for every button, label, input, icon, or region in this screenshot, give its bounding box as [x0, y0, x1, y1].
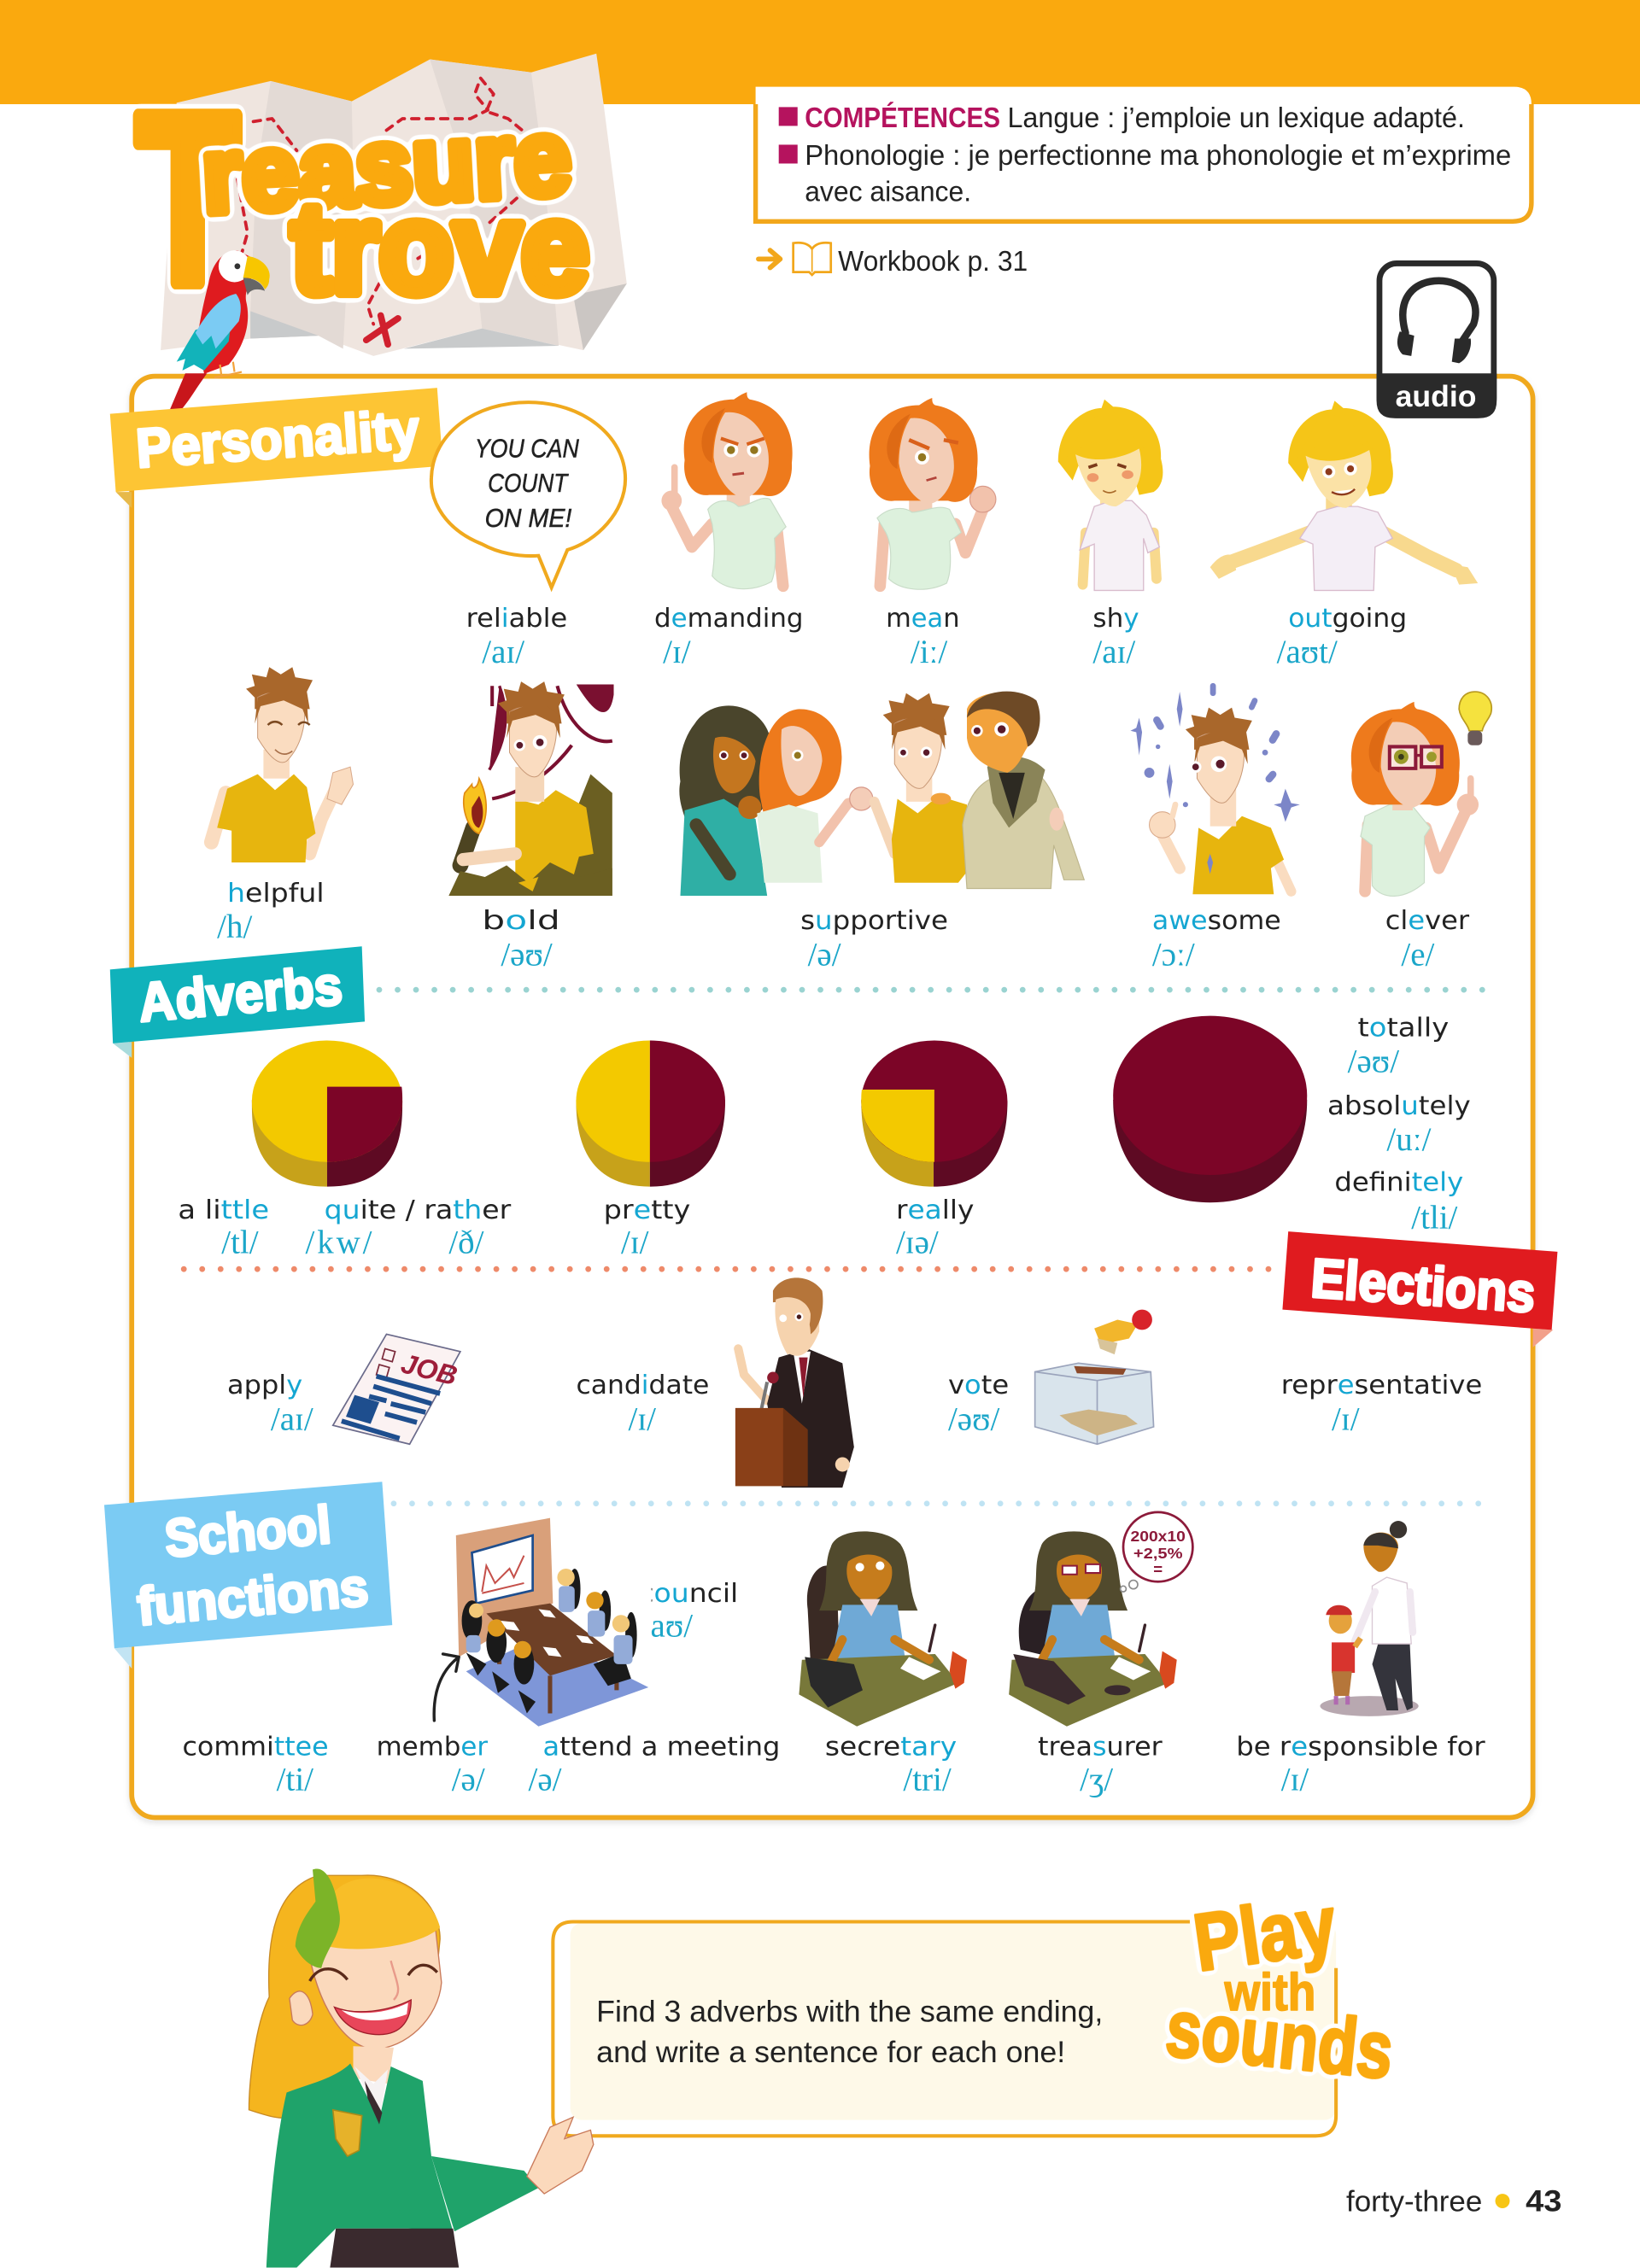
word: outgoing: [1277, 604, 1407, 670]
heading: Play with sounds: [1162, 1879, 1397, 2096]
word: supportive: /ə/: [808, 936, 841, 973]
illustration: helpful boy: [211, 667, 353, 862]
word: awesome: [1152, 906, 1281, 973]
illustration: treasurer: [1009, 1512, 1192, 1727]
heading: Personality: Personality: [134, 398, 421, 479]
word: pretty: [604, 1195, 690, 1261]
word: apply: /aɪ/: [271, 1400, 313, 1437]
heading: Adverbs: Adverbs: [136, 955, 345, 1033]
treasure cross: [366, 315, 398, 344]
panel: play with sounds activity: [553, 1921, 1336, 2136]
speech bubble: you can count on me: COUNT: [488, 469, 569, 498]
page number footer: forty-three: [1346, 2185, 1482, 2218]
word: absolutely: /uː/: [1386, 1121, 1432, 1158]
illustration: clever girl with light bulb: [1351, 692, 1491, 896]
word: apply: [227, 1371, 313, 1437]
word: be responsible for: [1236, 1733, 1485, 1797]
title: Treasure trove: [136, 63, 589, 334]
word: council: council: [638, 1579, 738, 1609]
word: representative: /ɪ/: [1332, 1400, 1360, 1437]
word: member: /ə/: [452, 1761, 485, 1797]
word: treasurer: /ʒ/: [1080, 1761, 1113, 1797]
heading: Elections: [1282, 1231, 1557, 1347]
icon: parrot: [165, 250, 270, 424]
illustration: job application: [333, 1334, 460, 1444]
illustration: mother and child: [1320, 1521, 1419, 1716]
word: quite / rather: /kw/: [306, 1225, 372, 1261]
word: totally: totally: [1358, 1013, 1449, 1043]
word: treasurer: [1038, 1733, 1163, 1797]
illustration: job application: JOB: [398, 1347, 460, 1391]
word: be responsible for: be responsible for: [1236, 1733, 1485, 1762]
illustration: mean girl: [870, 398, 996, 589]
illustration: laughing girl: [249, 1868, 594, 2267]
word: pretty: /ɪ/: [621, 1225, 649, 1261]
illustration: shy boy: [1058, 400, 1163, 590]
word: committee: [183, 1733, 329, 1797]
heading: Play with sounds: sounds: [1162, 1983, 1397, 2096]
arrow: member pointer: [434, 1654, 459, 1721]
word: demanding: /ɪ/: [663, 634, 691, 670]
icon: audio headphones badge: [1377, 263, 1496, 418]
heading: School functions: School: [162, 1495, 333, 1569]
orange header band: [0, 0, 1640, 104]
word: quite / rather: /ð/: [448, 1225, 484, 1261]
word: totally: /əʊ/: [1348, 1043, 1399, 1080]
word: secretary: secre tary: [825, 1733, 957, 1762]
word: definitely: defini tely: [1334, 1168, 1463, 1198]
word: reliable: reliable: [466, 604, 567, 634]
word: be responsible for: /ɪ/: [1281, 1761, 1309, 1797]
word: really: /ɪə/: [896, 1225, 939, 1261]
word: mean: [886, 604, 960, 670]
word: a little: a li ttle: [178, 1195, 269, 1225]
word: shy: /aɪ/: [1092, 634, 1135, 670]
word: attend a meeting: [529, 1733, 780, 1797]
word: shy: shy: [1092, 604, 1139, 634]
word: outgoing: /aʊt/: [1277, 634, 1338, 670]
word: bold: /əʊ/: [501, 936, 553, 973]
word: really: [896, 1195, 974, 1261]
word: clever: [1385, 906, 1470, 973]
word: member: [377, 1733, 489, 1797]
dashed treasure route: [237, 79, 524, 324]
heading: Adverbs: [110, 946, 365, 1058]
word: demanding: demanding: [654, 604, 804, 634]
heading: Elections: Elections: [1309, 1248, 1538, 1324]
word: quite / rather: [306, 1195, 512, 1261]
word: really: really: [896, 1195, 974, 1225]
illustration: awesome boy with sparkles: [1130, 683, 1300, 894]
panel: vocabulary frame: [132, 377, 1533, 1821]
word: vote: /əʊ/: [948, 1400, 999, 1437]
speech bubble: you can count on me: YOU CAN: [475, 435, 580, 464]
word: clever: /e/: [1401, 936, 1435, 973]
pie chart: full: [1113, 1016, 1307, 1202]
title: Treasure trove: trove: [291, 175, 589, 319]
word: committee: committee: [183, 1733, 329, 1762]
word: supportive: [800, 906, 948, 973]
word: attend a meeting: attend a meeting: [542, 1733, 780, 1762]
word: member: member: [377, 1733, 489, 1762]
competences box: Phonologie : je perfectionne ma phonologie et m’exprime: [805, 140, 1511, 172]
word: apply: apply: [227, 1371, 302, 1400]
competences box: Langue : j’emploie un lexique adapté.: [1007, 102, 1465, 134]
illustration: outgoing boy: [1210, 400, 1478, 590]
icon: audio headphones badge: audio: [1396, 379, 1476, 413]
competences box: COMPÉTENCES: [805, 102, 1000, 134]
speech bubble: you can count on me: ON ME!: [485, 504, 572, 533]
thought bubble: [1121, 1512, 1192, 1592]
word: reliable: [466, 604, 567, 670]
treasure map illustration: [161, 54, 627, 356]
word: treasurer: treasurer: [1038, 1733, 1163, 1762]
word: absolutely: absol utely: [1327, 1091, 1471, 1121]
word: definitely: [1334, 1168, 1463, 1236]
illustration: ballot box: [1035, 1310, 1154, 1444]
word: vote: vote: [948, 1371, 1009, 1400]
speech bubble: you can count on me: [431, 402, 625, 587]
competences box: [756, 87, 1532, 221]
word: bold: [482, 906, 560, 973]
word: demanding: [654, 604, 804, 670]
page number footer: [1346, 2183, 1561, 2218]
thought bubble: +2,5%: [1133, 1545, 1183, 1562]
heading: School functions: functions: [135, 1558, 371, 1637]
heading: Play with sounds: Play: [1188, 1879, 1342, 1989]
heading: Personality: [110, 388, 443, 508]
word: absolutely: [1327, 1091, 1471, 1158]
word: definitely: /tli/: [1411, 1200, 1458, 1236]
heading: School functions: [104, 1482, 392, 1669]
word: supportive: supportive: [800, 906, 948, 936]
word: bold: b o ld: [482, 906, 560, 936]
word: quite / rather: quite / ra ther: [325, 1195, 512, 1225]
panel: play with sounds activity: Find 3 adverbs with the same ending,: [596, 1994, 1103, 2028]
word: awesome: awesome: [1152, 906, 1281, 936]
word: a little: /tl/: [221, 1225, 259, 1261]
word: helpful: /h/: [217, 909, 253, 945]
word: pretty: pretty: [604, 1195, 690, 1225]
word: clever: clever: [1385, 906, 1470, 936]
word: representative: [1281, 1371, 1482, 1437]
word: secretary: /tri/: [903, 1761, 952, 1797]
word: vote: [948, 1371, 1009, 1437]
title: Treasure trove: T: [136, 63, 239, 334]
word: representative: representative: [1281, 1371, 1482, 1400]
pie chart: a little, one quarter: [252, 1040, 402, 1187]
illustration: secretary: [799, 1531, 967, 1727]
word: totally: [1348, 1013, 1449, 1080]
illustration: bold boy with torch: [448, 681, 612, 896]
workbook reference: Workbook p. 31: [838, 246, 1028, 278]
word: candidate: /ɪ/: [628, 1400, 656, 1437]
word: a little: [178, 1195, 269, 1261]
word: council: [638, 1579, 738, 1645]
pie chart: quite, half: [576, 1040, 725, 1187]
competences box: avec aisance.: [805, 177, 971, 208]
word: candidate: candidate: [576, 1371, 709, 1400]
page number footer: 43: [1526, 2183, 1561, 2218]
word: awesome: /ɔː/: [1152, 936, 1195, 973]
word: candidate: [576, 1371, 709, 1437]
word: attend a meeting: /ə/: [529, 1761, 562, 1797]
thought bubble: =: [1153, 1560, 1163, 1578]
word: council: /aʊ/: [641, 1608, 693, 1645]
pie chart: pretty, three quarters: [861, 1040, 1007, 1187]
word: helpful: [217, 879, 325, 945]
word: shy: [1092, 604, 1139, 670]
word: secretary: [825, 1733, 957, 1797]
illustration: committee meeting: [442, 1517, 652, 1731]
word: committee: /ti/: [277, 1761, 313, 1797]
title: Treasure trove: reasure: [199, 96, 574, 236]
illustration: candidate at lectern: [735, 1277, 854, 1488]
word: mean: /iː/: [911, 634, 947, 670]
word: mean: mean: [886, 604, 960, 634]
word: outgoing: outgoing: [1288, 604, 1407, 634]
panel: play with sounds activity: and write a sentence for each one!: [596, 2035, 1065, 2069]
illustration: supportive friends: [679, 692, 1084, 896]
illustration: demanding girl: [661, 392, 793, 589]
word: reliable: /aɪ/: [482, 634, 524, 670]
heading: Play with sounds: with: [1224, 1963, 1315, 2021]
workbook reference: [758, 243, 1028, 278]
thought bubble: 200x10: [1130, 1528, 1186, 1545]
word: helpful: helpful: [227, 879, 325, 909]
